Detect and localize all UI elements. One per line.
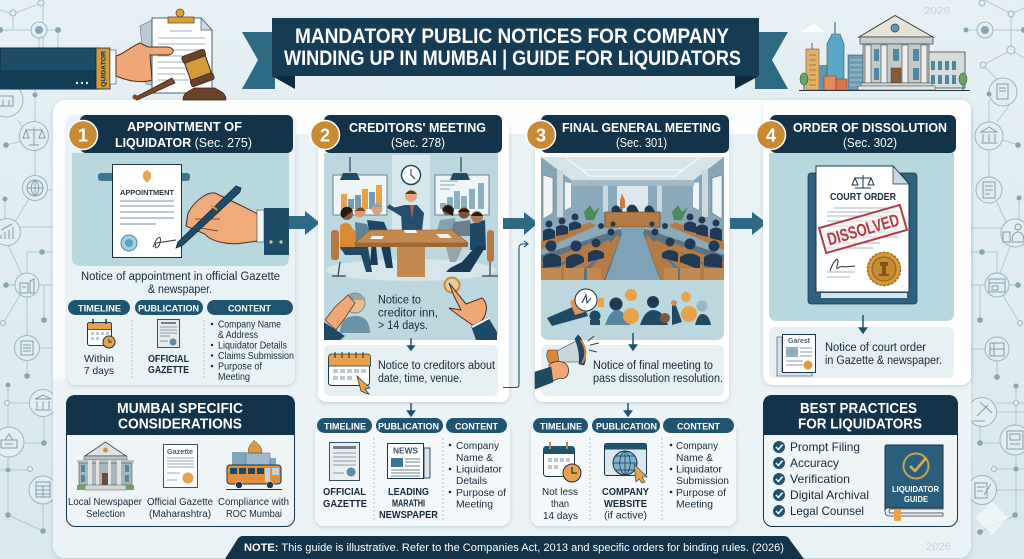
step 2 header: (Sec. 278): [391, 136, 445, 150]
step 1 table: OFFICIAL: [148, 354, 189, 365]
arrow: step 3 to step 4: [730, 212, 767, 235]
content list: Purpose of: [676, 487, 726, 499]
panel: step 2 table: NEWSPAPER: [379, 510, 439, 521]
title line 2: WINDING UP IN MUMBAI | GUIDE FOR LIQUIDATORS: [284, 47, 741, 70]
year watermark top: 2026: [924, 5, 950, 17]
step 1 table: Within: [84, 353, 114, 365]
panel: step 3 table: (if active): [604, 510, 647, 522]
content list: & Address: [218, 330, 258, 341]
icon: courthouse: [77, 442, 134, 490]
step 1 illustration: [72, 153, 289, 266]
hand pointing: [444, 278, 497, 340]
step 3 header: [541, 115, 729, 153]
illustration: Mumbai skyline and courthouse: [799, 16, 970, 90]
step 1 number badge: [68, 120, 98, 150]
step 3 number badge: 3: [536, 126, 546, 146]
footer note: NOTE: This guide is illustrative. Refer to the Companies Act, 2013 and specific orders for binding rules. (2026): [244, 542, 784, 554]
step 3 header: (Sec. 301): [616, 136, 667, 150]
step 2 illustration caption: Notice to: [378, 294, 421, 306]
background network pattern: right: [964, 0, 1024, 535]
background network pattern: left: [0, 0, 61, 534]
step 1 table: GAZETTE: [148, 365, 189, 376]
content list: Liquidator Details: [218, 340, 287, 352]
checklist: Prompt Filing: [790, 440, 860, 454]
panel: step 3 table: than: [551, 498, 569, 510]
step 4 notice box: Garest: [788, 338, 811, 345]
panel: step 3 table: PUBLICATION: [596, 422, 657, 432]
arrow: small down arrow in step 2: [408, 338, 414, 350]
step 4 header: ORDER OF DISSOLUTION: [793, 120, 947, 135]
step 2 header: [324, 115, 502, 153]
main content panel: [53, 100, 971, 558]
year watermark bottom: 2026: [926, 541, 951, 553]
step 2 notice box: Notice to creditors about: [378, 360, 496, 372]
panel: step 3 table: 14 days: [543, 510, 578, 522]
step 3 notice box: pass dissolution resolution.: [593, 373, 723, 385]
title line 1: MANDATORY PUBLIC NOTICES FOR COMPANY: [295, 25, 729, 48]
step 4 illustration: court order: COURT ORDER: [830, 192, 896, 203]
panel: Mumbai specific considerations: Compliance with: [218, 496, 289, 508]
checklist: Legal Counsel: [790, 504, 864, 518]
light band behind step columns: [295, 134, 765, 386]
panel: Mumbai specific considerations: Official Gazette: [147, 496, 213, 508]
step 4 notice box: Notice of court order: [825, 342, 926, 354]
step 4 number badge: [756, 120, 786, 150]
step 1 table: CONTENT: [228, 304, 271, 314]
content list: Submission: [676, 475, 729, 487]
panel: Mumbai specific considerations: ROC Mumbai: [226, 508, 282, 520]
icon: website globe: [604, 444, 647, 483]
content list: Name &: [676, 452, 713, 464]
step 1 table: 7 days: [84, 365, 114, 377]
step 2 number badge: 2: [320, 126, 330, 146]
panel: step 2 creditors meeting: [310, 115, 509, 402]
panel: Mumbai specific considerations: MUMBAI SPECIFIC: [117, 401, 244, 417]
panel: Mumbai specific considerations: CONSIDERATIONS: [118, 416, 242, 432]
step 1 illustration: APPOINTMENT: [120, 188, 174, 197]
arrow: step 2 to step 3: [503, 212, 538, 235]
panel: step 3 final general meeting: [526, 115, 729, 402]
step 3 notice box: Notice of final meeting to: [593, 360, 713, 372]
icon: gazette: Gazette: [167, 449, 193, 456]
step 2 illustration caption: creditor inn,: [378, 308, 438, 320]
content list: [670, 440, 729, 510]
content list: Company Name: [218, 320, 281, 330]
step 2 header: CREDITORS' MEETING: [349, 120, 486, 135]
panel: step 2 table: GAZETTE: [323, 499, 367, 510]
step 4 header: (Sec. 302): [843, 136, 897, 150]
panel: Mumbai specific considerations: [66, 395, 295, 526]
icon: gazette: [164, 444, 198, 488]
step 4 notice box: in Gazette & newspaper.: [825, 355, 942, 367]
panel: best practices for liquidators: BEST PRACTICES: [800, 401, 917, 417]
step 4 illustration: court order: [769, 153, 954, 321]
step 3 number badge: [526, 120, 556, 150]
step 2 number badge: [310, 120, 340, 150]
step 2 notice box: [324, 345, 498, 396]
panel: step 4 order of dissolution: [756, 100, 971, 385]
step 2 illustration caption: > 14 days.: [378, 320, 428, 332]
panel: best practices for liquidators: [763, 395, 958, 526]
icon: liquidator guide book: GUIDE: [904, 494, 928, 504]
left benches: [541, 222, 596, 250]
panel: step 3 table: [531, 418, 736, 526]
step 1 header: APPOINTMENT OF: [127, 119, 242, 134]
arrow: step 3 down to table: [624, 403, 632, 416]
stamp: dissolved: DISSOLVED: [825, 210, 901, 249]
icon: bus with Mumbai landmark: [226, 440, 282, 490]
table: [355, 230, 468, 243]
checklist: [773, 440, 869, 518]
seated people right: [436, 204, 494, 272]
step 3 header: FINAL GENERAL MEETING: [562, 120, 721, 135]
footer note: [225, 536, 804, 559]
panel: step 2 table: MARATHI: [392, 498, 425, 510]
step 1 number badge: 1: [78, 126, 88, 146]
step 4 number badge: 4: [766, 126, 776, 146]
content list: Company: [456, 440, 500, 452]
content list: Meeting: [676, 498, 713, 510]
content list: [449, 440, 506, 510]
arrow: small down arrow in step 4: [860, 315, 866, 333]
chair legs: [332, 262, 498, 276]
arrow: connector from step 2 notice to step 3: [503, 241, 528, 388]
panel: step 2 table: TIMELINE: [324, 422, 366, 432]
panel: step 3 table: WEBSITE: [604, 499, 647, 510]
step 4 notice box: [769, 327, 954, 378]
icon: newspaper: [388, 444, 430, 478]
audience with raised hands: [547, 289, 711, 326]
step 1 notice text: [81, 271, 280, 296]
icon: gazette: [330, 442, 360, 480]
title banner: [242, 18, 788, 89]
arrow: step 1 to step 2: [289, 211, 320, 235]
step 1 table: PUBLICATION: [138, 304, 199, 314]
step 1 header: [80, 115, 293, 153]
content list: Liquidator: [456, 464, 502, 476]
content list: Claims Submission: [218, 351, 294, 362]
content list: Purpose of: [456, 487, 506, 499]
step 1 table: [68, 300, 294, 383]
step 4 header: [770, 115, 956, 153]
step 1 notice text: & newspaper.: [148, 284, 212, 296]
right benches: [669, 222, 724, 250]
icon: megaphone with hand: [535, 335, 599, 389]
checklist: Accuracy: [790, 456, 839, 470]
step 1 table: TIMELINE: [78, 304, 121, 314]
arrow: step 2 down to table: [408, 403, 414, 416]
content list: [211, 320, 294, 383]
content list: Company: [676, 440, 719, 452]
panel: step 2 table: [315, 418, 510, 526]
seated people left: [331, 204, 393, 272]
content list: Meeting: [456, 498, 493, 510]
panel: step 3 table: COMPANY: [602, 487, 649, 498]
panel: Mumbai specific considerations: Selection: [86, 508, 125, 520]
panel: step 3 table: TIMELINE: [540, 422, 582, 432]
icon: calendar clock: [88, 319, 115, 348]
step 2 illustration caption: [378, 294, 438, 332]
panel: Mumbai specific considerations: Local Newspaper: [68, 496, 142, 508]
content list: Purpose of: [218, 362, 262, 372]
checklist: Digital Archival: [790, 488, 869, 502]
step 2 notice box: date, time, venue.: [378, 373, 462, 385]
step 2 illustration: meeting room: [324, 153, 498, 340]
icon: liquidator guide book: [885, 445, 943, 521]
presenter: [388, 190, 424, 231]
panel: Mumbai specific considerations: (Maharashtra): [149, 508, 211, 520]
illustration: hand with clipboard and gavel: [0, 9, 226, 100]
content list: Details: [456, 475, 487, 487]
step 3 notice box: [541, 345, 724, 396]
icon: gazette: [158, 320, 180, 348]
content list: Liquidator: [676, 464, 722, 476]
illustration: hand with clipboard and gavel: QUIDATOR: [102, 50, 108, 87]
panel: step 2 table: LEADING: [388, 487, 429, 498]
panel: step 2 table: PUBLICATION: [378, 422, 439, 432]
panel: step 3 table: CONTENT: [677, 422, 720, 432]
icon: calendar clock: [544, 442, 581, 482]
panel: step 2 table: CONTENT: [455, 422, 498, 432]
panel: step 3 table: Not less: [542, 486, 578, 498]
content list: Meeting: [218, 372, 250, 383]
step 1 notice text: Notice of appointment in official Gazette: [81, 271, 280, 283]
panel: best practices for liquidators: FOR LIQUIDATORS: [798, 416, 922, 432]
icon: liquidator guide book: LIQUIDATOR: [892, 484, 939, 494]
creditor person with hand: [324, 293, 370, 340]
step 3 illustration: assembly hall: [541, 157, 724, 340]
seated delegates: [543, 214, 722, 271]
panel: step 1 appointment of liquidator: [67, 115, 295, 385]
step 1 header: LIQUIDATOR (Sec. 275): [115, 135, 252, 150]
content list: Name &: [456, 452, 493, 464]
arrow: small down arrow in step 3: [630, 333, 636, 350]
stamp: dissolved: [819, 205, 907, 253]
checklist: Verification: [790, 472, 850, 486]
panel: step 2 table: OFFICIAL: [323, 487, 366, 498]
icon: newspaper: NEWS: [393, 446, 418, 456]
